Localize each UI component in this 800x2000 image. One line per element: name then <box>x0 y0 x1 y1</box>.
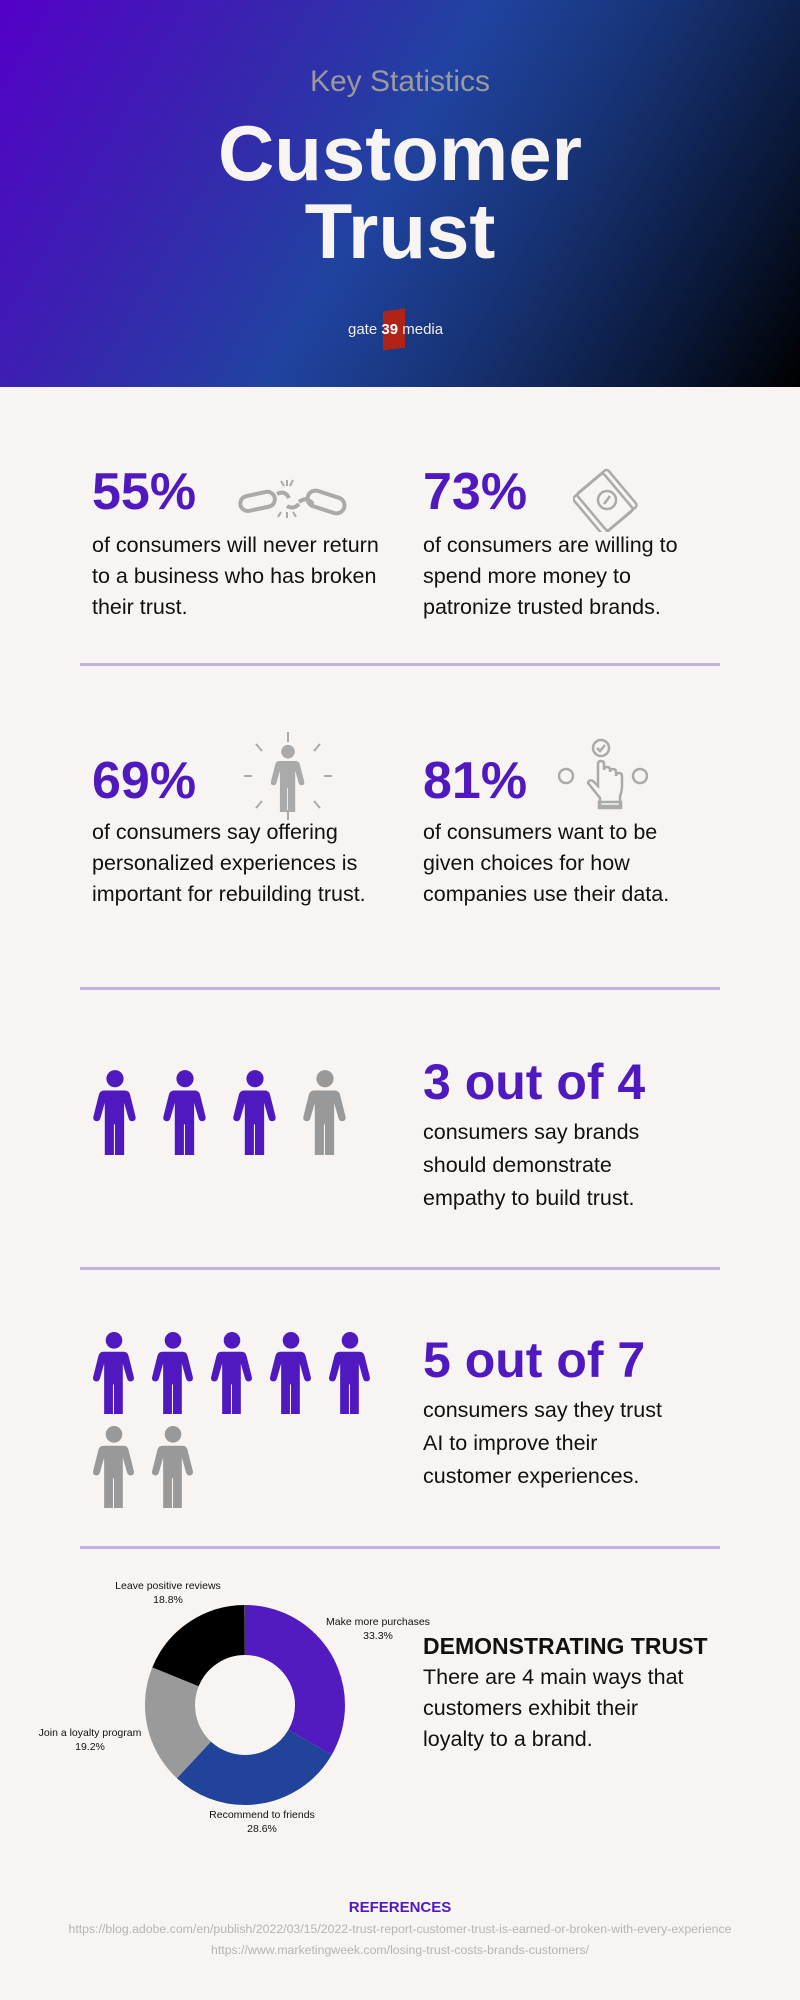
stat 55% <box>92 463 379 619</box>
icon: hand choice <box>558 738 648 810</box>
logo <box>348 308 444 350</box>
label: loyalty: 19.2% <box>75 1741 105 1753</box>
label: recommend: Recommend to friends <box>209 1809 315 1821</box>
donut chart <box>38 1580 430 1835</box>
stat 81%: 81% <box>423 752 527 810</box>
label: reviews <box>115 1580 221 1606</box>
stat 5 out of 7: consumers say they trust <box>423 1398 662 1422</box>
text: given choices for how <box>423 851 630 875</box>
icon: broken chain <box>238 480 346 518</box>
references: REFERENCES <box>349 1899 451 1916</box>
text: patronize trusted brands. <box>423 595 661 619</box>
text <box>92 820 366 906</box>
label: reviews: 18.8% <box>153 1594 183 1606</box>
stat 73% <box>423 463 678 619</box>
text: of consumers say offering <box>92 820 338 844</box>
stat 69% <box>92 732 366 906</box>
stat 5 out of 7: AI to improve their <box>423 1431 597 1455</box>
title: Trust <box>305 187 495 275</box>
people 3 of 4 <box>93 1070 346 1155</box>
references: https://www.marketingweek.com/losing-trust-costs-brands-customers/ <box>211 1943 589 1957</box>
stat 3 out of 4: 3 out of 4 <box>423 1054 645 1110</box>
logo: gate 39 media <box>348 321 443 338</box>
text <box>423 533 678 619</box>
label: purchases: Make more purchases <box>326 1616 430 1628</box>
text: of consumers want to be <box>423 820 657 844</box>
people 5 of 7 <box>93 1332 370 1508</box>
text: of consumers are willing to <box>423 533 678 557</box>
text: important for rebuilding trust. <box>92 882 366 906</box>
label: purchases: 33.3% <box>363 1630 393 1642</box>
label: recommend: 28.6% <box>247 1823 277 1835</box>
demonstrating trust text <box>423 1633 708 1751</box>
demonstrating trust text: DEMONSTRATING TRUST <box>423 1633 708 1659</box>
label: loyalty: Join a loyalty program <box>39 1727 141 1739</box>
label: purchases <box>326 1616 430 1642</box>
title <box>218 109 582 275</box>
text <box>423 820 669 906</box>
icon: person with rays <box>244 732 332 820</box>
demonstrating trust text: customers exhibit their <box>423 1696 638 1720</box>
stat 5 out of 7 <box>423 1332 662 1488</box>
text: of consumers will never return <box>92 533 379 557</box>
stat 5 out of 7: customer experiences. <box>423 1464 639 1488</box>
references: https://blog.adobe.com/en/publish/2022/03/15/2022-trust-report-customer-trust-is-earned-or-broken-with-every-experience <box>68 1922 732 1936</box>
demonstrating trust text: loyalty to a brand. <box>423 1727 593 1751</box>
icon: money <box>573 468 638 532</box>
stat 3 out of 4: should demonstrate <box>423 1153 612 1177</box>
stat 73%: 73% <box>423 463 527 521</box>
text: their trust. <box>92 595 188 619</box>
text: to a business who has broken <box>92 564 376 588</box>
label: recommend <box>209 1809 315 1835</box>
demonstrating trust text: There are 4 main ways that <box>423 1665 684 1689</box>
stat 69%: 69% <box>92 752 196 810</box>
text: companies use their data. <box>423 882 669 906</box>
subtitle: Key Statistics <box>310 65 490 98</box>
stat 3 out of 4 <box>423 1054 645 1210</box>
stat 81% <box>423 738 669 906</box>
text <box>92 533 379 619</box>
stat 5 out of 7: 5 out of 7 <box>423 1332 645 1388</box>
stat 3 out of 4: consumers say brands <box>423 1120 639 1144</box>
references <box>68 1899 732 1957</box>
title: Customer <box>218 109 582 197</box>
text: personalized experiences is <box>92 851 357 875</box>
label: loyalty <box>38 1727 141 1753</box>
header banner <box>0 0 800 387</box>
label: reviews: Leave positive reviews <box>115 1580 221 1592</box>
stat 55%: 55% <box>92 463 196 521</box>
text: spend more money to <box>423 564 631 588</box>
stat 3 out of 4: empathy to build trust. <box>423 1186 635 1210</box>
